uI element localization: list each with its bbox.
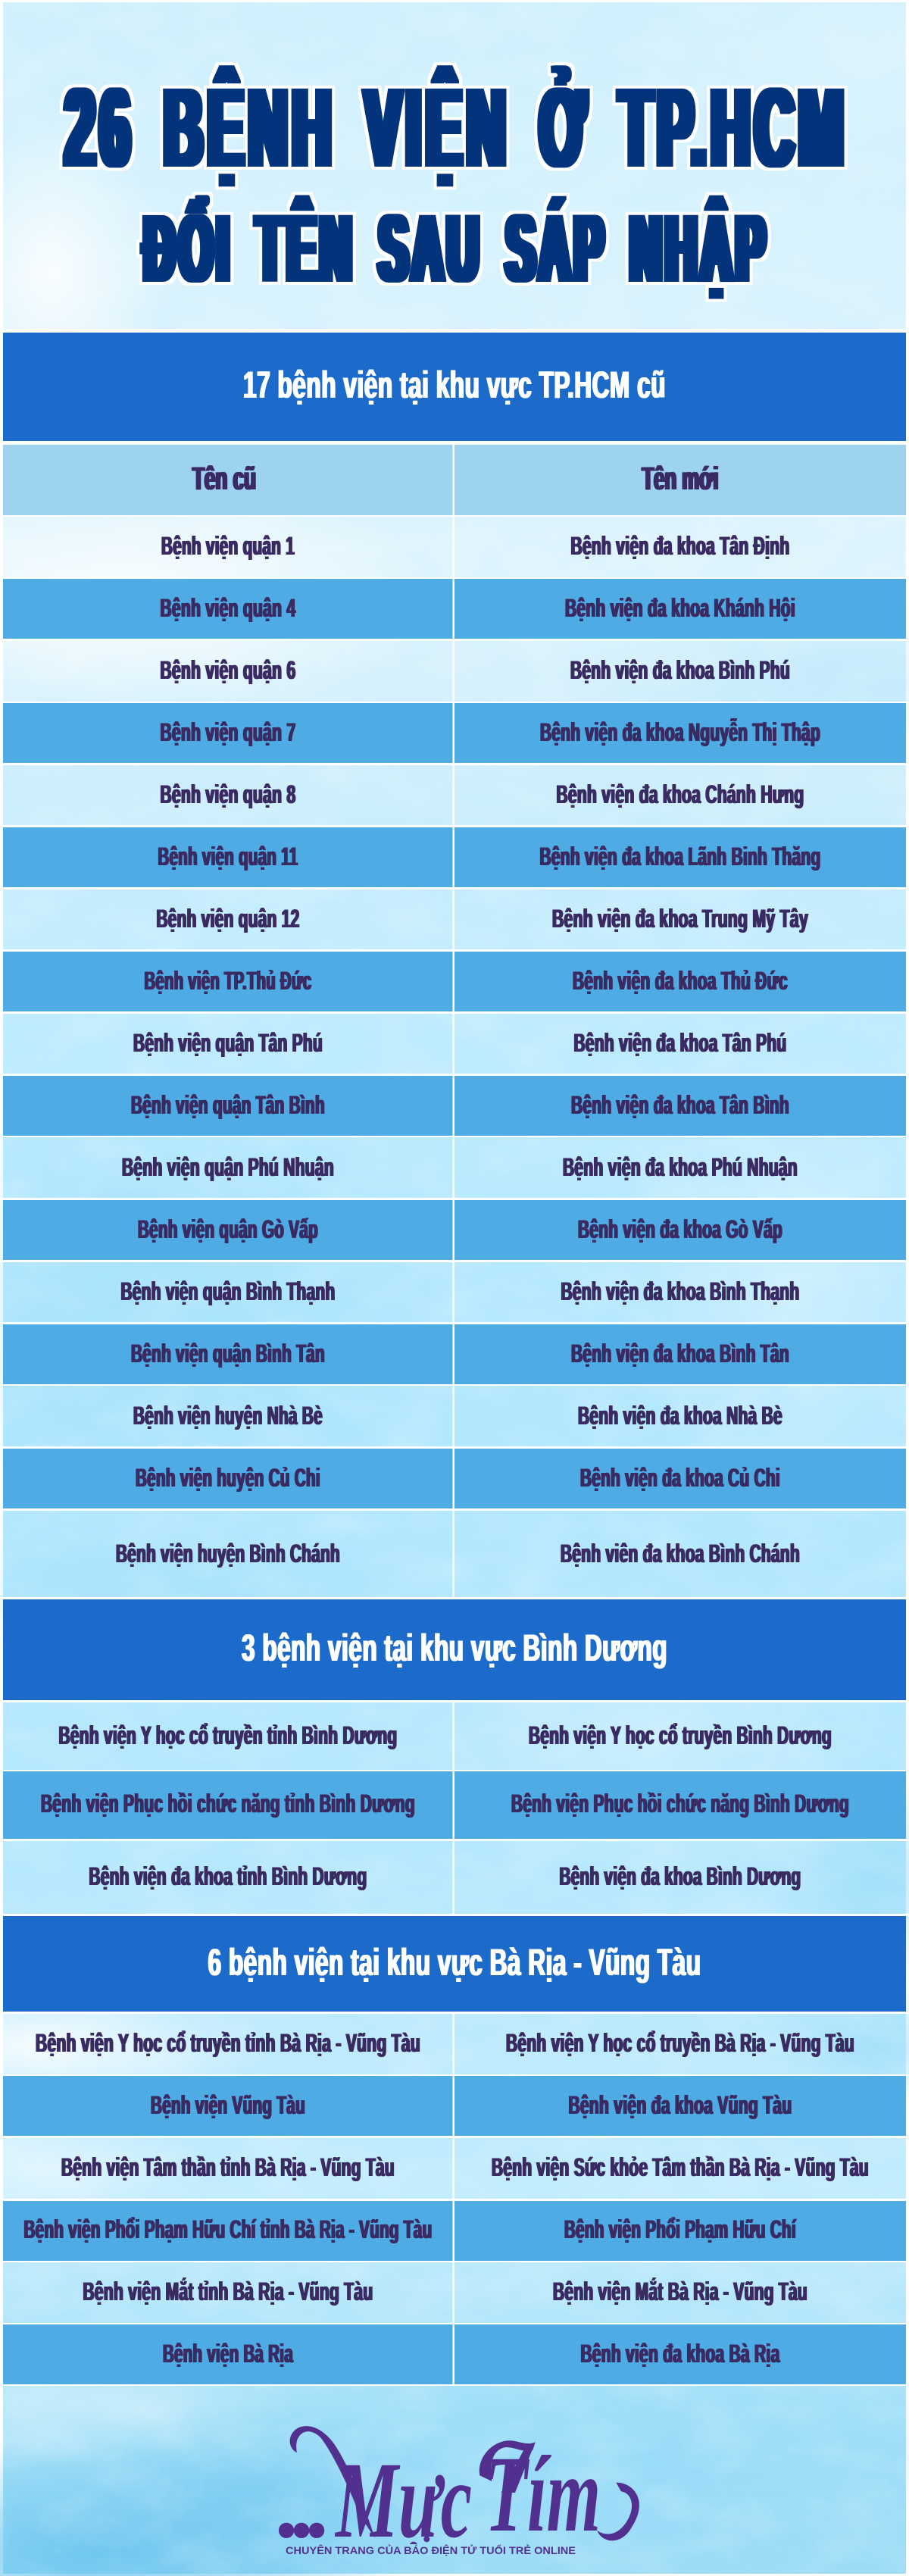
- row: quận 7: Bệnh viện quận 7: [161, 718, 295, 747]
- row: Y học cổ truyền Bình Dương: Bệnh viện Y học cổ truyền tỉnh Bình Dương: [59, 1721, 397, 1750]
- white gap between title and table: [0, 329, 909, 333]
- row: quận 1: Bệnh viện quận 1: [161, 532, 295, 561]
- row: quận 11: [3, 827, 906, 887]
- row: Phục hồi chức năng Bình Dương: [3, 1771, 906, 1839]
- row: Nhà Bè: Bệnh viện đa khoa Nhà Bè: [578, 1402, 782, 1430]
- row: quận 6: Bệnh viện quận 6: [161, 656, 295, 685]
- title: [65, 66, 848, 302]
- logo: Mực Tím: Tím: [485, 2434, 601, 2555]
- row: Tân Bình: [3, 1076, 906, 1136]
- row: Bà Rịa: Bệnh viện Bà Rịa: [163, 2340, 293, 2368]
- row: Vũng Tàu: [3, 2076, 906, 2136]
- row: Gò Vấp: [3, 1200, 906, 1260]
- row: đa khoa Bình Dương: Bệnh viện đa khoa tỉnh Bình Dương: [89, 1862, 367, 1891]
- row: đa khoa Bình Dương: [89, 1862, 801, 1891]
- row: quận 12: Bệnh viện quận 12: [156, 905, 300, 933]
- row: Phú Nhuận: Bệnh viện quận Phú Nhuận: [122, 1153, 334, 1182]
- panel: 3 hospitals in Bình Dương: [0, 1599, 909, 1916]
- column headers: Tên cũ: [192, 461, 256, 497]
- section header: Bình Dương: 3 bệnh viện tại khu vực Bình Dương: [242, 1627, 667, 1669]
- row: TP.Thủ Đức: [3, 952, 906, 1011]
- row: Phổi Phạm Hữu Chí: [3, 2201, 906, 2261]
- row: Vũng Tàu: Bệnh viện Vũng Tàu: [151, 2091, 305, 2120]
- row: Nhà Bè: [133, 1402, 782, 1430]
- row: Gò Vấp: Bệnh viện quận Gò Vấp: [138, 1215, 318, 1244]
- row: quận 8: [161, 780, 804, 809]
- row: Nhà Bè: Bệnh viện huyện Nhà Bè: [133, 1402, 323, 1430]
- row: quận 7: [3, 703, 906, 763]
- panel: 17 hospitals in former TP.HCM: [0, 333, 909, 1599]
- white gaps: [0, 1700, 909, 1916]
- row: quận 6: [161, 656, 790, 685]
- row: Bà Rịa: Bệnh viện đa khoa Bà Rịa: [580, 2340, 780, 2368]
- logo: Mực Tím: Mực: [335, 2440, 472, 2561]
- row: Bình Tân: Bệnh viện quận Bình Tân: [131, 1340, 325, 1368]
- row: Tâm thần: [61, 2153, 869, 2182]
- panel: 6 hospitals in Bà Rịa - Vũng Tàu: [0, 1916, 909, 2386]
- row: Bình Chánh: Bệnh viện huyện Bình Chánh: [116, 1540, 340, 1568]
- row: Y học cổ truyền Bà Rịa - Vũng Tàu: Bệnh viện Y học cổ truyền tỉnh Bà Rịa - Vũng Tàu: [36, 2029, 420, 2058]
- row: Bà Rịa: [3, 2324, 906, 2384]
- row: Mắt: [83, 2277, 807, 2306]
- row: Củ Chi: [3, 1449, 906, 1508]
- row: Phục hồi chức năng Bình Dương: Bệnh viện Phục hồi chức năng tỉnh Bình Dương: [41, 1790, 415, 1818]
- row: quận 11: Bệnh viện quận 11: [158, 843, 298, 871]
- logo swashes: [290, 2426, 639, 2542]
- row: Củ Chi: Bệnh viện đa khoa Củ Chi: [580, 1464, 780, 1493]
- row: Tân Phú: Bệnh viện quận Tân Phú: [133, 1029, 323, 1058]
- section header: TP.HCM: [3, 333, 906, 441]
- white gaps: [0, 2012, 909, 2386]
- row: quận 8: Bệnh viện quận 8: [161, 780, 295, 809]
- row: quận 4: [3, 579, 906, 639]
- white gaps: [0, 441, 909, 1599]
- section header: TP.HCM: 17 bệnh viện tại khu vực TP.HCM cũ: [243, 364, 666, 406]
- row: Gò Vấp: Bệnh viện đa khoa Gò Vấp: [578, 1215, 782, 1244]
- logo tagline: CHUYÊN TRANG CỦA BÁO ĐIỆN TỬ TUỔI TRẺ ONLINE: [286, 2545, 576, 2556]
- logo wordmark: ...: [278, 2453, 332, 2558]
- row: Tân Bình: Bệnh viện quận Tân Bình: [131, 1091, 325, 1120]
- column headers: [3, 445, 906, 515]
- row: Tân Phú: [133, 1029, 786, 1058]
- row: Tâm thần: Bệnh viện Tâm thần tỉnh Bà Rịa - Vũng Tàu: [61, 2153, 395, 2182]
- row: TP.Thủ Đức: Bệnh viện TP.Thủ Đức: [144, 967, 312, 996]
- section header: Bà Rịa - Vũng Tàu: [3, 1916, 906, 2012]
- row: Phổi Phạm Hữu Chí: Bệnh viện Phổi Phạm Hữu Chí tỉnh Bà Rịa - Vũng Tàu: [24, 2215, 432, 2244]
- row: Bình Tân: [3, 1324, 906, 1384]
- section header: Bình Dương: [3, 1599, 906, 1700]
- row: Bình Thạnh: [121, 1277, 800, 1306]
- logo: Mực Tím: [278, 2426, 639, 2561]
- row: quận 12: [156, 905, 808, 933]
- row: Củ Chi: Bệnh viện huyện Củ Chi: [136, 1464, 320, 1493]
- row: Bình Chánh: [116, 1540, 800, 1568]
- column headers: Tên mới: [642, 461, 718, 497]
- row: quận 1: [161, 532, 789, 561]
- row: quận 4: Bệnh viện quận 4: [161, 594, 295, 623]
- row: Phú Nhuận: [122, 1153, 798, 1182]
- row: Bình Thạnh: Bệnh viện quận Bình Thạnh: [121, 1277, 335, 1306]
- row: Mắt: Bệnh viện Mắt tỉnh Bà Rịa - Vũng Tàu: [83, 2277, 373, 2306]
